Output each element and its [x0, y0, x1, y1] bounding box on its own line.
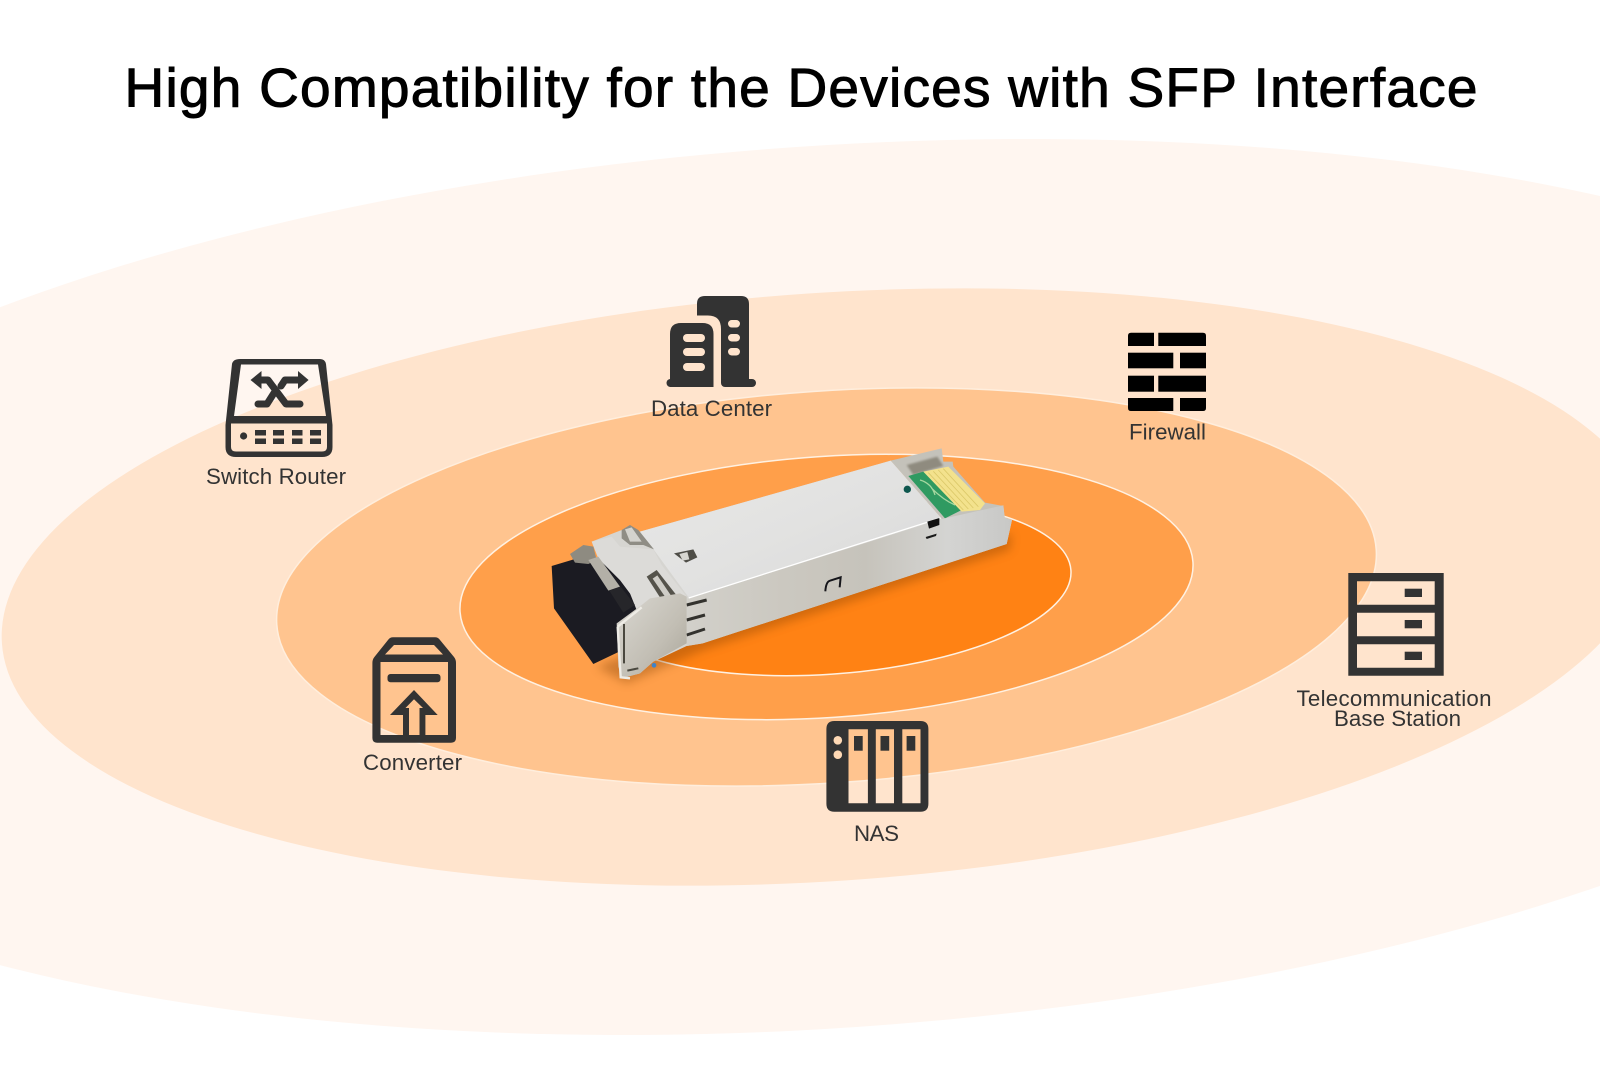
ring 1: innermost [576, 483, 1077, 691]
ring 4 [0, 237, 1600, 937]
ring 3 [263, 354, 1390, 820]
PCB gold fingers [923, 467, 985, 512]
label: firewall: Firewall [1129, 420, 1206, 444]
icon: firewall [1128, 333, 1206, 411]
base silhouette [592, 461, 1012, 678]
label: telecommunication base station: Base Station [1334, 706, 1461, 731]
rear rail behind PCB [891, 448, 1003, 521]
grey loop behind latch [570, 545, 597, 564]
label: NAS: NAS [854, 821, 899, 846]
icon: converter [372, 637, 456, 743]
icon: NAS [826, 721, 928, 812]
PCB green board [908, 472, 962, 518]
icon: switch router [226, 359, 332, 457]
front bail [617, 593, 687, 678]
blue accent [652, 663, 656, 668]
black dust plug [552, 553, 637, 664]
latch tab [588, 557, 620, 591]
hole and marks [904, 486, 911, 493]
label: converter: Converter [363, 750, 463, 775]
ring 2 [451, 432, 1202, 742]
top notch [674, 549, 697, 563]
side slots [687, 600, 707, 635]
label: telecommunication base station [1296, 686, 1492, 731]
title: High Compatibility for the Devices with SFP Interface [124, 56, 1478, 118]
side face of metal housing [687, 505, 1012, 646]
label: telecommunication base station: Telecommunication [1296, 686, 1492, 711]
top face of metal housing [640, 461, 941, 597]
icon: telecommunication base station [1348, 573, 1444, 676]
label: switch router: Switch Router [206, 464, 347, 489]
latch body [592, 537, 687, 610]
latch pin [647, 570, 679, 606]
top clip [622, 525, 654, 549]
icon: data center [666, 296, 756, 387]
highlight edge [689, 518, 941, 598]
drop shadow [597, 533, 1012, 683]
label: data center: Data Center [651, 396, 773, 421]
product: SFP transceiver module [552, 448, 1012, 683]
